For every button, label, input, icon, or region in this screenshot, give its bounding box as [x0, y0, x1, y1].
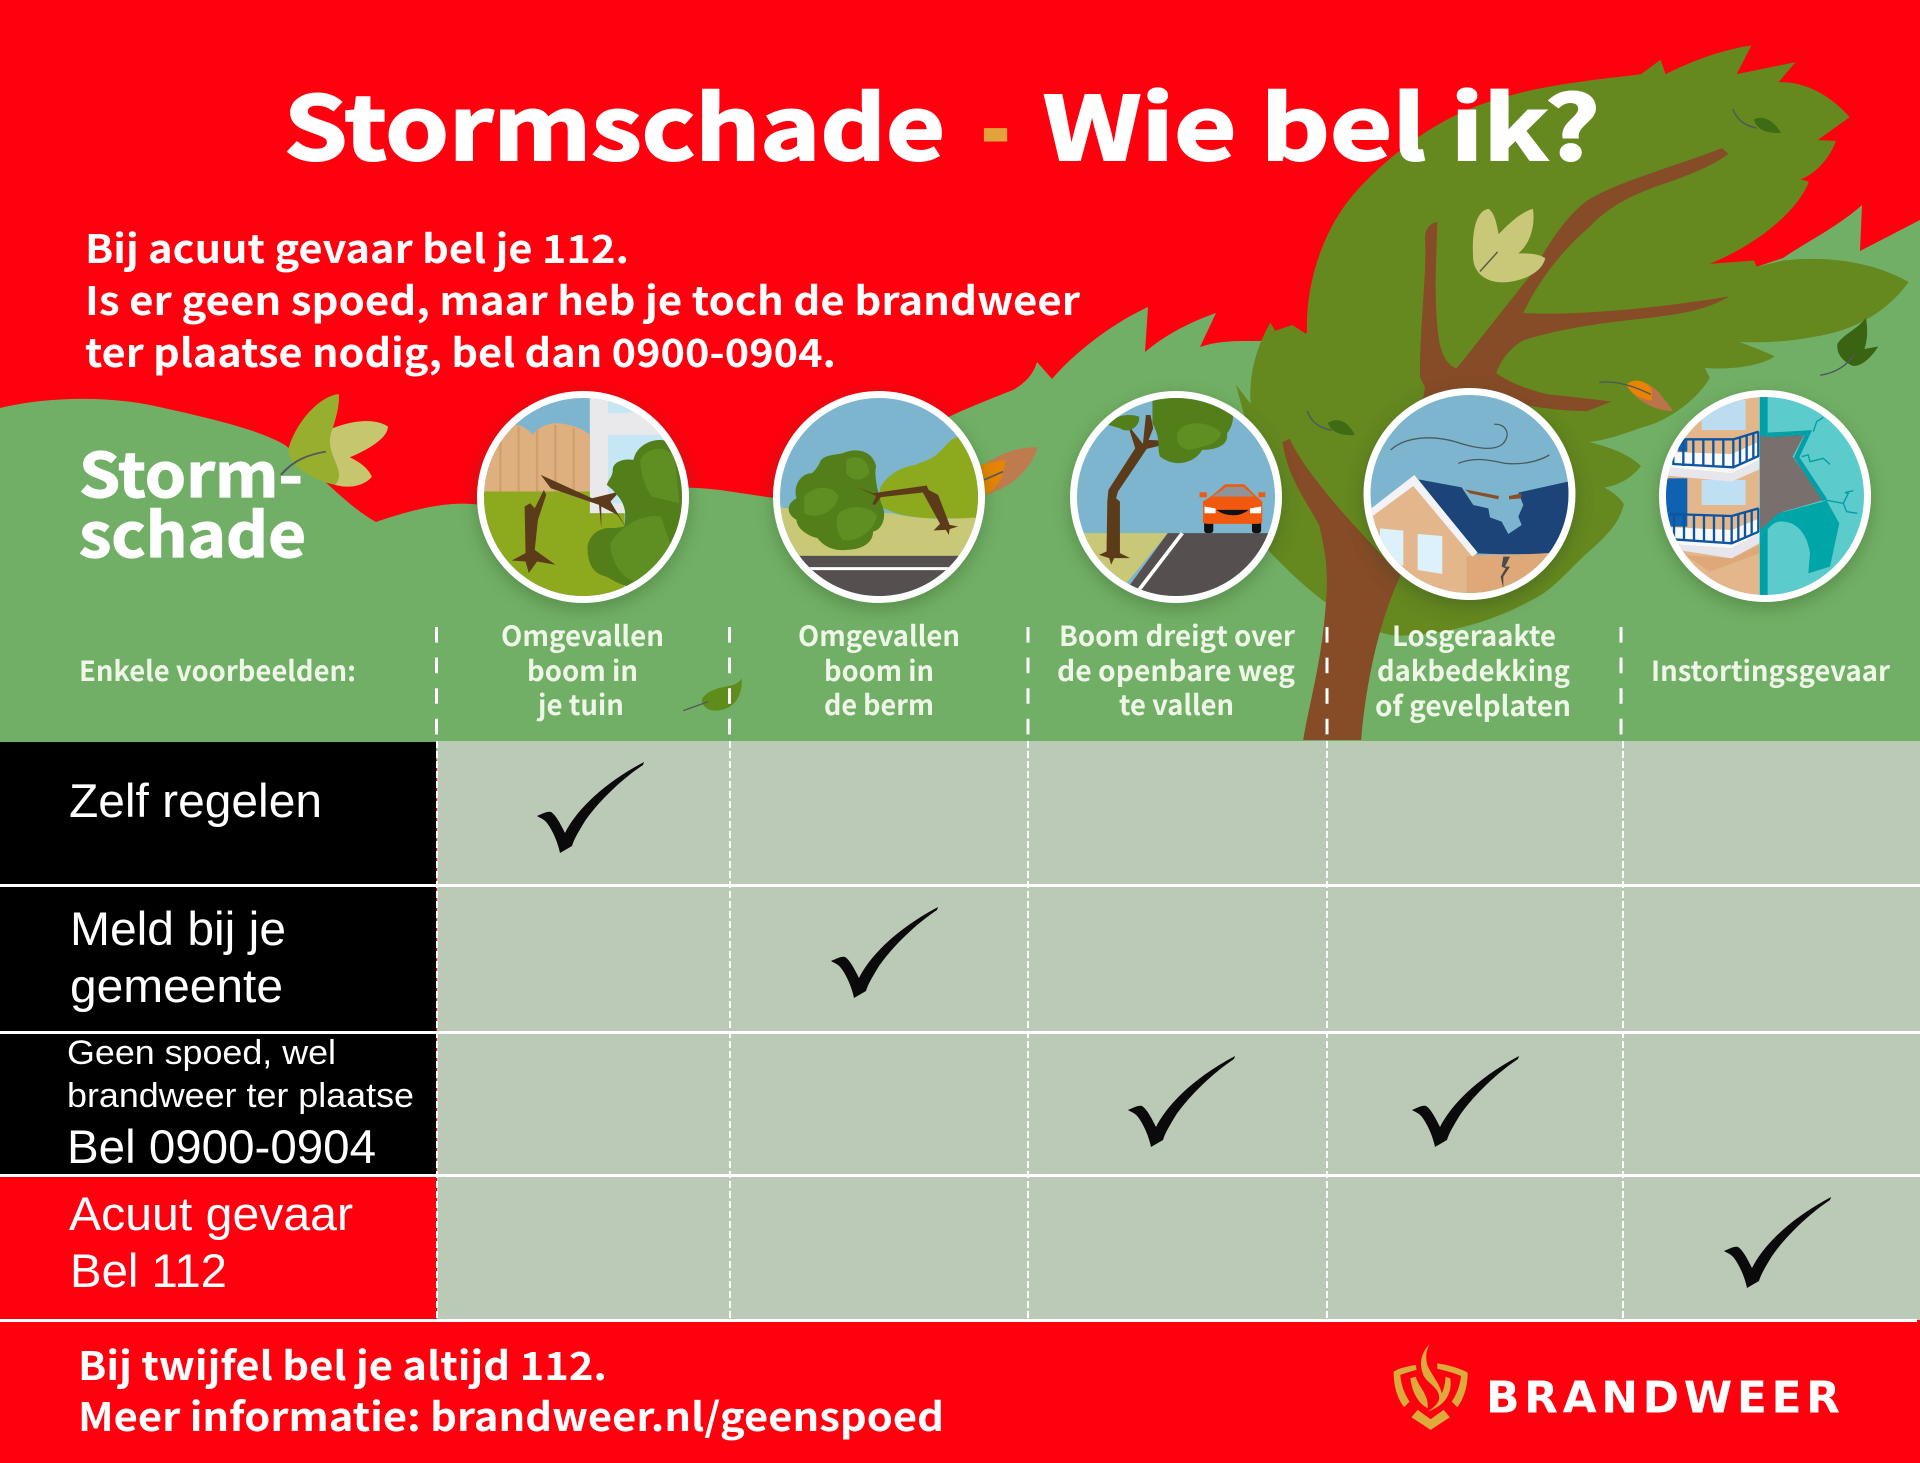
column label 1: boom in — [527, 650, 638, 690]
icon: brandweer logo emblem — [1394, 1344, 1468, 1430]
column label 3: Boom dreigt over — [1059, 615, 1296, 655]
title: - — [982, 59, 1009, 186]
leaf: dark right — [1820, 318, 1878, 375]
intro text — [85, 219, 1081, 379]
row label: Acuut gevaar: Bel 112 — [70, 1244, 227, 1297]
row label: Geen spoed: brandweer ter plaatse — [67, 1077, 414, 1115]
column label 4 — [1375, 615, 1571, 725]
check: row 2 column 2 — [831, 907, 938, 998]
column label 5: Instortingsgevaar — [1651, 650, 1891, 690]
title: Wie bel ik? — [1043, 59, 1600, 186]
check: row 4 column 5 — [1724, 1197, 1831, 1288]
column label 4: dakbedekking — [1377, 650, 1570, 690]
label: Enkele voorbeelden: Enkele voorbeelden: — [79, 650, 356, 690]
table body — [437, 741, 1920, 1320]
heading: Storm-schade: schade — [79, 486, 306, 575]
tree trunk — [1283, 439, 1400, 740]
leaf: orange — [1599, 381, 1673, 411]
circle 2: fallen tree on verge — [770, 387, 988, 609]
leaf: dark top — [1733, 109, 1781, 133]
column label 1 — [501, 615, 664, 724]
title: Stormschade — [284, 59, 945, 186]
heading: Storm-schade: Storm- — [79, 426, 303, 515]
column label 1: je tuin — [536, 684, 624, 724]
footer text: Meer informatie: brandweer.nl/geenspoed — [78, 1387, 944, 1443]
intro text: ter plaatse nodig, bel dan 0900-0904. — [85, 323, 836, 379]
row label: Meld bij je gemeente: gemeente — [70, 959, 283, 1012]
footer text — [78, 1336, 944, 1443]
row label: Geen spoed: Geen spoed, wel — [67, 1034, 336, 1072]
column label 2: Omgevallen — [798, 615, 960, 655]
leaf: big olive beside heading — [281, 394, 388, 487]
footer text: Bij twijfel bel je altijd 112. — [78, 1336, 607, 1392]
column label 3: te vallen — [1119, 684, 1234, 724]
title — [284, 59, 1600, 186]
intro text: Is er geen spoed, maar heb je toch de brandweer — [85, 271, 1081, 327]
column label 3: de openbare weg — [1057, 650, 1295, 690]
circle 3: tree threatening road with car — [1064, 387, 1286, 609]
row label: Zelf regelen: Zelf regelen — [69, 774, 322, 827]
leaf: pale on canopy — [1473, 209, 1545, 282]
column label 4: of gevelplaten — [1375, 685, 1571, 725]
row label: Acuut gevaar — [0, 1177, 436, 1319]
row label: Geen spoed — [0, 1034, 436, 1174]
leaf: orange beside circle 2 — [980, 447, 1038, 495]
column label 4: Losgeraakte — [1392, 615, 1556, 655]
storm tree — [1236, 45, 1909, 740]
row label: Meld bij je gemeente — [0, 887, 436, 1031]
leaf: small dark — [1307, 411, 1355, 435]
heading: Storm-schade — [79, 426, 306, 575]
row label: Geen spoed: Bel 0900-0904 — [67, 1120, 376, 1173]
column label 2 — [798, 615, 960, 724]
circle 5: collapse danger — [1659, 390, 1873, 608]
column label 3 — [1057, 615, 1296, 724]
column label 1: Omgevallen — [501, 615, 664, 655]
row label: Meld bij je gemeente: Meld bij je — [70, 902, 286, 955]
check: row 3 column 4 — [1412, 1056, 1519, 1147]
intro text: Bij acuut gevaar bel je 112. — [85, 219, 629, 275]
row label: Acuut gevaar: Acuut gevaar — [69, 1187, 353, 1240]
column label 2: boom in — [824, 650, 934, 690]
circle 1: fallen tree in garden — [473, 387, 693, 609]
logo wordmark: BRANDWEER — [1486, 1372, 1840, 1424]
check: row 3 column 3 — [1128, 1056, 1235, 1147]
circle 4: loose roof covering — [1364, 388, 1576, 606]
green hill landscape — [0, 205, 1920, 760]
leaf: small near first column — [683, 678, 742, 711]
check: row 1 column 1 — [537, 762, 644, 853]
row label: Zelf regelen — [0, 742, 436, 884]
tree canopy — [1236, 45, 1909, 636]
tree branches — [1396, 148, 1729, 578]
column label 2: de berm — [824, 684, 934, 724]
